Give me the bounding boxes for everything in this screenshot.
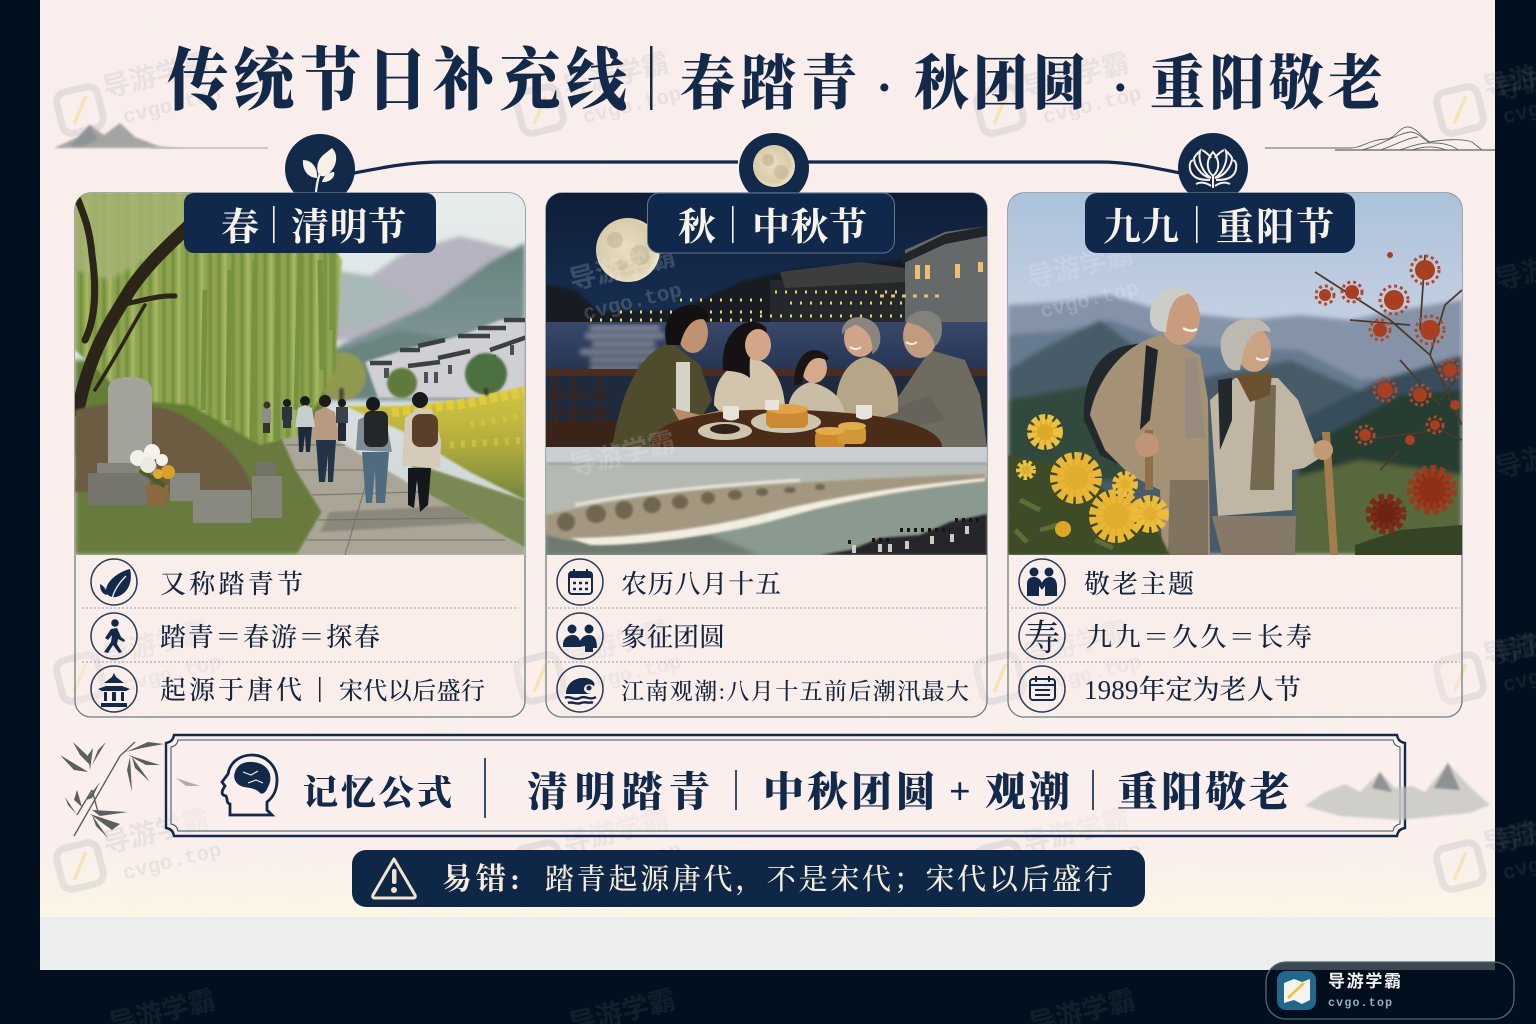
icon: pavilion xyxy=(91,666,137,712)
callout: common mistake warning: 踏青起源唐代，不是宋代；宋代以后盛行 xyxy=(545,863,1113,896)
text: brand url: cvgo.top xyxy=(1328,997,1392,1010)
icon: chrysanthemum lotus badge xyxy=(1178,133,1248,203)
lower water xyxy=(546,478,987,555)
fact rows: autumn xyxy=(548,559,985,712)
icon: calendar xyxy=(557,559,603,605)
watermarks on paper: cvgo.top xyxy=(1041,84,1144,130)
right grass edge xyxy=(410,462,525,548)
white village houses xyxy=(365,318,527,398)
text: nine nine equals longevity: 九九＝久久＝长寿 xyxy=(1086,623,1312,652)
panel: autumn Mid-Autumn card xyxy=(546,193,987,717)
text: brand name: 导游学霸 xyxy=(1328,971,1401,991)
left grass xyxy=(75,430,325,555)
text: formula: 中秋团圆 xyxy=(763,769,936,815)
river with moon reflection xyxy=(546,322,987,369)
photo: family mid-autumn reunion xyxy=(546,193,987,555)
white foam xyxy=(570,478,985,545)
yellow chrysanthemums xyxy=(1008,419,1170,555)
tombstone xyxy=(88,377,282,523)
heading: autumn pill: 中秋节 xyxy=(752,207,867,249)
watermarks on paper: cvgo.top xyxy=(121,652,224,698)
fact rows: double ninth xyxy=(1011,559,1460,712)
watermarks on paper: cvgo.top xyxy=(581,652,684,698)
icon: longevity character: 寿 xyxy=(1024,618,1060,658)
watermarks on paper: 导游学霸 xyxy=(100,804,212,859)
heading: autumn pill: 秋 xyxy=(678,207,716,249)
village trees xyxy=(318,352,507,408)
watermarks on paper: cvgo.top xyxy=(121,84,224,130)
title: 秋团圆 xyxy=(914,52,1087,117)
watermark over photo: 导游学霸 xyxy=(566,427,678,482)
watermark over photo: cvgo.top xyxy=(581,280,685,327)
watermark over photo xyxy=(1024,239,1142,325)
title: · xyxy=(1112,59,1129,115)
watermarks on paper: 导游学霸 xyxy=(1020,48,1132,103)
heading: spring pill: 清明节 xyxy=(291,207,406,249)
title: 春踏青 xyxy=(680,52,857,117)
watermarks on paper: cvgo.top xyxy=(1041,652,1144,698)
text: formula: + xyxy=(949,771,971,813)
icon: leaf xyxy=(91,559,137,605)
icon: spring leaf badge xyxy=(285,134,355,204)
text: also called Taqing festival: 又称踏青节 xyxy=(160,570,303,599)
riverside town xyxy=(546,226,987,322)
icon: moon badge xyxy=(739,133,809,203)
watermarks on paper: 导游学霸 xyxy=(100,616,212,671)
rapeseed field xyxy=(345,386,525,500)
text: warning: 易错: xyxy=(442,863,520,896)
wave body xyxy=(546,474,985,543)
text: formula xyxy=(527,769,1290,815)
photo: elderly couple hiking xyxy=(1008,193,1462,555)
heading: double ninth pill xyxy=(1085,193,1355,253)
willow trunk xyxy=(75,197,184,416)
walkers xyxy=(262,392,441,512)
panel: memory formula frame xyxy=(166,735,1405,836)
watermarks on paper: 导游学霸 xyxy=(1020,616,1132,671)
red chrysanthemums xyxy=(1355,471,1462,555)
watermarks on paper: 导游学霸 xyxy=(560,804,672,859)
title: 重阳敬老 xyxy=(1150,52,1383,117)
watermarks on paper: cvgo.top xyxy=(121,840,224,886)
icon: walker xyxy=(91,613,137,659)
panel: spring Qingming card xyxy=(75,193,527,717)
heading: double ninth pill: 重阳节 xyxy=(1216,207,1334,249)
curling wave shadows xyxy=(557,484,825,531)
icon: longevity character xyxy=(1019,613,1065,659)
crowd xyxy=(820,514,987,555)
icon: map tile xyxy=(1277,971,1316,1010)
text: memory formula label: 记忆公式 xyxy=(303,774,452,813)
watermark over photo xyxy=(570,248,681,475)
text: respect for elders: 敬老主题 xyxy=(1084,570,1194,599)
connector line between season badges xyxy=(354,162,1180,173)
decoration: ink bamboo xyxy=(60,742,200,838)
watermark over photo: cvgo.top xyxy=(1038,278,1142,325)
text: formula: 清明踏青 xyxy=(527,769,710,815)
grave mound xyxy=(75,403,252,492)
icon: calendar xyxy=(1019,666,1065,712)
back hedge behind willow xyxy=(75,360,325,455)
watermarks on paper: 导游学霸 xyxy=(100,48,212,103)
watermarks on paper: 导游学霸 xyxy=(560,48,672,103)
old woman with scarf xyxy=(1210,318,1338,555)
icon: warning triangle xyxy=(373,859,415,898)
father xyxy=(612,305,722,447)
text: lunar August 15: 农历八月十五 xyxy=(621,570,781,599)
balcony railing xyxy=(546,369,987,447)
text: designated elders day 1989: 1989年定为老人节 xyxy=(1084,675,1301,705)
heading: spring pill xyxy=(184,193,436,253)
icon: line-art mountains top right xyxy=(1265,127,1495,150)
title: · xyxy=(876,59,893,115)
child xyxy=(788,350,845,418)
icon: family xyxy=(557,613,603,659)
watermarks on paper: 导游学霸 xyxy=(560,616,672,671)
grandfather xyxy=(883,310,987,447)
title xyxy=(167,44,1383,120)
heading: spring pill: 春 xyxy=(221,207,259,249)
mother xyxy=(714,322,785,420)
stone path xyxy=(276,420,525,555)
watermarks on paper: cvgo.top xyxy=(581,840,684,886)
icon: ink mountains top left xyxy=(54,123,268,148)
panel: double ninth Chongyang card xyxy=(1008,193,1462,717)
text: symbolizes reunion: 象征团圆 xyxy=(621,623,725,652)
flower offering xyxy=(130,444,175,506)
badge: brand logo xyxy=(1266,962,1514,1019)
text: Taqing equals spring outing: 踏青＝春游＝探春 xyxy=(160,623,380,652)
decoration: ink mountains bottom right xyxy=(1305,763,1490,820)
watermarks on paper: cvgo.top xyxy=(1041,840,1144,886)
watermarks on paper: 导游学霸 xyxy=(1020,804,1132,859)
willow foliage xyxy=(75,193,342,445)
mountains xyxy=(1008,295,1462,555)
grandmother xyxy=(836,317,898,422)
photo: Qingming outing scene xyxy=(75,193,527,555)
fact rows: spring: 宋代以后盛行 xyxy=(339,678,485,705)
fact rows: spring xyxy=(82,559,519,712)
red autumn branches xyxy=(1315,252,1462,470)
icon: tide wave xyxy=(557,666,603,712)
icon: brain in head xyxy=(222,755,277,815)
watermark over photo: 导游学霸 xyxy=(1024,239,1136,294)
watermark over photo: 导游学霸 xyxy=(566,241,678,296)
tea table xyxy=(650,400,942,449)
heading: double ninth pill: 九九 xyxy=(1103,207,1179,249)
callout: common mistake warning xyxy=(352,850,1145,907)
text: origin Tang, flourished after Song: 起源于唐代 xyxy=(160,676,302,705)
text: formula: 重阳敬老 xyxy=(1117,769,1290,815)
full moon xyxy=(596,218,660,282)
icon: elderly pair xyxy=(1019,559,1065,605)
text: best tide watching time: 江南观潮:八月十五前后潮汛最大 xyxy=(621,679,969,704)
heading: autumn pill xyxy=(648,193,894,253)
watermarks on paper: cvgo.top xyxy=(581,84,684,130)
old man with backpack xyxy=(1084,287,1210,555)
title: 传统节日补充线 xyxy=(167,44,627,120)
text: formula: 观潮 xyxy=(985,769,1070,815)
photo: Qiantang tidal bore xyxy=(546,447,987,555)
